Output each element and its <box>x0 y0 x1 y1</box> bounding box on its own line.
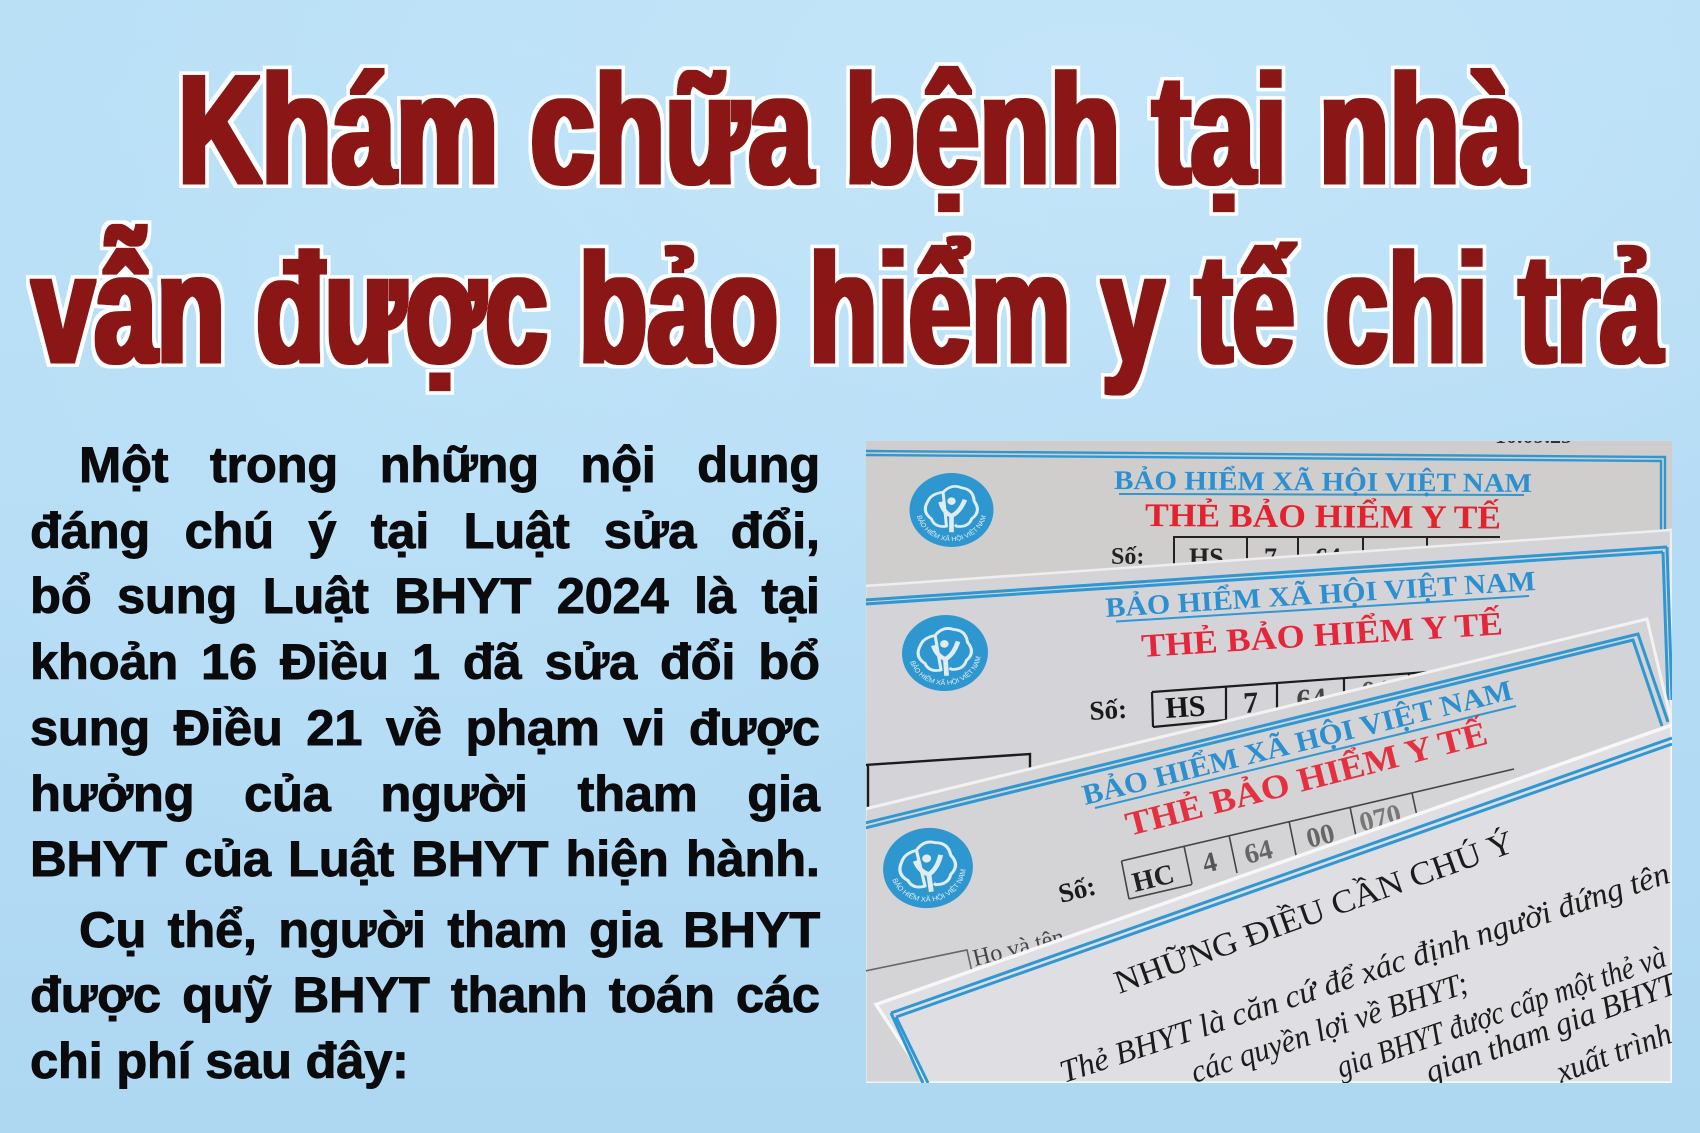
body text: bổ sung Luật BHYT 2024 là tại <box>30 568 820 624</box>
card 2: Số: <box>1088 694 1128 726</box>
card 3: HC <box>1129 859 1177 899</box>
body text: Cụ thể, người tham gia BHYT <box>79 902 820 958</box>
photo: health insurance cards <box>865 423 1700 1090</box>
card 4: NHỮNG ĐIỀU CẦN CHÚ Ý <box>1109 823 1519 1002</box>
card 3: 00 <box>1303 818 1338 855</box>
card 1: HS <box>1189 543 1224 572</box>
body text: được quỹ BHYT thanh toán các <box>30 967 820 1023</box>
card 4 <box>876 725 1700 1090</box>
card 3: Họ và tên <box>970 924 1067 972</box>
card 2: BẢO HIỂM XÃ HỘI VIỆT NAM <box>1104 565 1537 624</box>
card 1 <box>865 451 1665 572</box>
card 4: các quyền lợi về BHYT; <box>1186 964 1473 1090</box>
card 1: BẢO HIỂM XÃ HỘI VIỆT NAM <box>1114 464 1532 498</box>
card 3: 070 <box>1356 799 1404 839</box>
card 2: 01 <box>1360 674 1392 709</box>
card 1: THẺ BẢO HIỂM Y TẾ <box>1145 495 1501 536</box>
body text: BHYT của Luật BHYT hiện hành. <box>30 831 820 887</box>
card 2: 64 <box>1295 682 1327 717</box>
card 1: Số: <box>1111 544 1144 570</box>
card 3: 4 <box>1199 846 1220 880</box>
body text: đáng chú ý tại Luật sửa đổi, <box>30 503 820 559</box>
card 3: 64 <box>1241 834 1276 871</box>
body text <box>30 437 821 1089</box>
card 3: Số: <box>1055 871 1099 909</box>
photo: health insurance cards: 10.09.25 <box>1495 423 1572 448</box>
card 2: HS <box>1164 690 1206 725</box>
card 4: Thẻ BHYT là căn cứ để xác định người đứng tên <box>1055 855 1674 1090</box>
card 1: 01 <box>1380 543 1406 572</box>
body text: chi phí sau đây: <box>30 1033 409 1089</box>
icon: logo card 3 <box>883 828 973 908</box>
card 2: THẺ BẢO HIỂM Y TẾ <box>1140 603 1504 665</box>
body text: Một trong những nội dung <box>79 437 820 493</box>
body text: khoản 16 Điều 1 đã sửa đổi bổ <box>30 634 820 690</box>
title <box>32 43 1663 395</box>
icon: logo card 1 <box>910 473 994 547</box>
card 2 <box>866 528 1672 808</box>
card 3 <box>865 619 1671 1083</box>
card 4: gian tham gia BHYT <box>1420 964 1683 1090</box>
card 1: 7 <box>1264 543 1277 572</box>
card 3: BẢO HIỂM XÃ HỘI VIỆT NAM <box>1079 674 1516 812</box>
card 1: 64 <box>1315 543 1341 572</box>
card 2: 7 <box>1242 686 1259 720</box>
card 3: THẺ BẢO HIỂM Y TẾ <box>1121 713 1491 844</box>
body text: sung Điều 21 về phạm vi được <box>30 700 820 756</box>
icon: logo card 2 <box>902 615 988 691</box>
body text: hưởng của người tham gia <box>30 766 820 822</box>
